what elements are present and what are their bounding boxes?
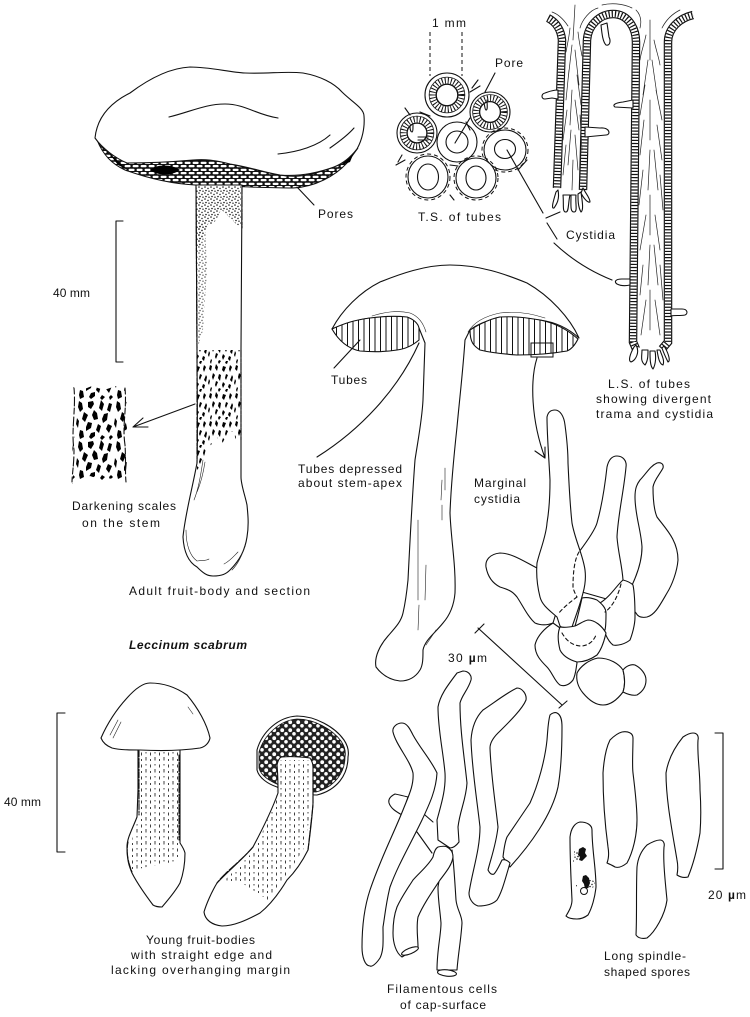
caption: L.S. of tubes: L.S. of tubes [608, 377, 690, 391]
caption: filamentous cells [387, 982, 497, 1012]
label: Marginal cystidia: cystidia [474, 492, 520, 506]
label: Pores: Pores [318, 207, 353, 221]
left stem stippling [197, 222, 207, 350]
scale: 1 mm: 1 mm [432, 16, 466, 30]
caption: T.S. of tubes: T.S. of tubes [418, 210, 501, 224]
second cystidium [575, 456, 626, 600]
stem [183, 185, 248, 576]
label: Cystidia with leader lines: Cystidia [566, 228, 615, 242]
stem shading [127, 751, 179, 872]
label: Pore: Pore [495, 56, 523, 70]
scale bar: 20 µm: 20 µm [708, 888, 746, 902]
scale bar: 40 mm young [4, 713, 65, 852]
sample box [531, 343, 553, 357]
marginal cystidia cluster [486, 410, 678, 705]
cap [101, 683, 210, 751]
caption: L.S. of tubes: trama and cystidia [596, 407, 713, 421]
label: Cystidia with leader lines [507, 150, 615, 280]
cap surface lines [169, 104, 354, 154]
cap outer [257, 716, 348, 795]
cap [95, 67, 364, 175]
stem [204, 757, 313, 926]
stem texture [129, 752, 179, 872]
upper stem scales [196, 186, 241, 260]
caption: young fruit-bodies: lacking overhanging margin [111, 963, 290, 977]
front cell [558, 620, 606, 662]
cap highlights [110, 707, 193, 738]
cell C end [401, 945, 419, 957]
dark pore patches [108, 150, 355, 174]
mid base cell [600, 580, 635, 645]
scale bar: 30 µm [448, 624, 567, 708]
scale bar: 40 mm adult: 40 mm [53, 286, 90, 300]
species name: Leccinum scabrum [129, 638, 247, 652]
scale bar: 40 mm young: 40 mm [4, 795, 41, 809]
caption: L.S. of tubes [596, 377, 713, 421]
tube cell 4 [437, 122, 477, 162]
wall cystidia [542, 90, 558, 99]
caption: adult fruit-body: Adult fruit-body and section [129, 584, 310, 598]
label: Tubes [331, 340, 367, 387]
arrow: box to marginal cystidia [533, 358, 545, 458]
cell B long [362, 723, 437, 966]
scale bar: 30 µm: 30 µm [448, 651, 487, 665]
label: Tubes depressed: Tubes depressed [298, 462, 402, 476]
stem base lines [186, 460, 245, 570]
dashed inner walls [558, 552, 621, 646]
scale: 1 mm [430, 16, 466, 76]
cell D end [437, 969, 457, 977]
small round cell [623, 665, 646, 695]
longitudinal section of tubes [542, 4, 693, 369]
mature fruit-body section [332, 265, 579, 681]
caption: filamentous cells: Filamentous cells [387, 982, 497, 996]
tube cell 3 [397, 113, 437, 153]
label: Marginal cystidia [474, 476, 526, 506]
right tubes [470, 317, 578, 355]
label: Pore [455, 56, 523, 143]
young fruit-body, whole [101, 683, 210, 907]
caption: young fruit-bodies [111, 933, 290, 977]
stem scales detail swatch [72, 386, 127, 484]
cell F [503, 713, 562, 867]
connectors [417, 815, 433, 853]
label: Tubes depressed: about stem-apex [298, 476, 402, 490]
lower tuft of left tube [553, 188, 590, 212]
caption: darkening scales: Darkening scales [72, 499, 176, 513]
young fruit-body, underside [204, 716, 348, 926]
stem edge shading [196, 187, 242, 463]
spore 3 [666, 733, 701, 877]
caption: darkening scales: on the stem [82, 516, 160, 530]
label: Tubes: Tubes [331, 373, 367, 387]
label: Tubes depressed [298, 343, 419, 490]
third cystidium [625, 463, 678, 617]
scale bar: 40 mm adult [53, 221, 123, 362]
caption: spindle-shaped spores [604, 949, 690, 979]
label: Pores [297, 187, 353, 221]
big cystidium [537, 410, 585, 628]
stem shading [217, 770, 313, 883]
branch stub [389, 794, 408, 815]
lower stem scales [197, 350, 241, 470]
tube walls [548, 14, 693, 349]
tube cell 6 [406, 154, 450, 200]
stem [127, 748, 185, 907]
transverse section of tubes [396, 73, 528, 200]
adult fruit-body with section [95, 67, 364, 576]
tube cell 2 [470, 92, 510, 132]
cell D lower [437, 850, 462, 970]
spore 4 [636, 840, 667, 938]
spore 1 with contents [566, 822, 596, 919]
hairs between tubes [396, 80, 527, 200]
cap outline and stem [332, 265, 579, 681]
cap underside: pores band [97, 140, 358, 188]
caption: young fruit-bodies: Young fruit-bodies [146, 933, 255, 947]
filamentous cells of cap-surface [362, 671, 562, 977]
caption: filamentous cells: of cap-surface [400, 998, 486, 1012]
tube cell 1 [425, 73, 469, 117]
caption: L.S. of tubes: showing divergent [596, 392, 712, 406]
tube cell 7 [454, 156, 498, 200]
cell A top [437, 671, 471, 848]
big round cell [577, 658, 624, 705]
caption: young fruit-bodies: with straight edge and [130, 948, 272, 962]
cell E [469, 688, 526, 906]
lower left cell [535, 623, 577, 686]
lower tuft of right tube [630, 345, 669, 369]
left lobe cystidium [486, 553, 560, 625]
label: Marginal cystidia: Marginal [474, 476, 526, 490]
divergent trama hairs [552, 4, 680, 335]
stem apex hatching [372, 312, 545, 645]
spore 2 [603, 732, 637, 867]
left tubes [332, 316, 419, 352]
cell C [393, 846, 453, 957]
arrow: stem to scales detail [133, 404, 195, 427]
stem texture [225, 760, 311, 900]
caption: spindle-shaped spores: shaped spores [604, 965, 690, 979]
caption: spindle-shaped spores: Long spindle- [604, 949, 686, 963]
tube cell 5 [482, 128, 528, 172]
round cell [575, 598, 606, 630]
scale bar: 20 µm [708, 733, 746, 902]
pore surface [259, 719, 345, 792]
spores [566, 732, 701, 938]
caption: darkening scales [72, 499, 176, 530]
